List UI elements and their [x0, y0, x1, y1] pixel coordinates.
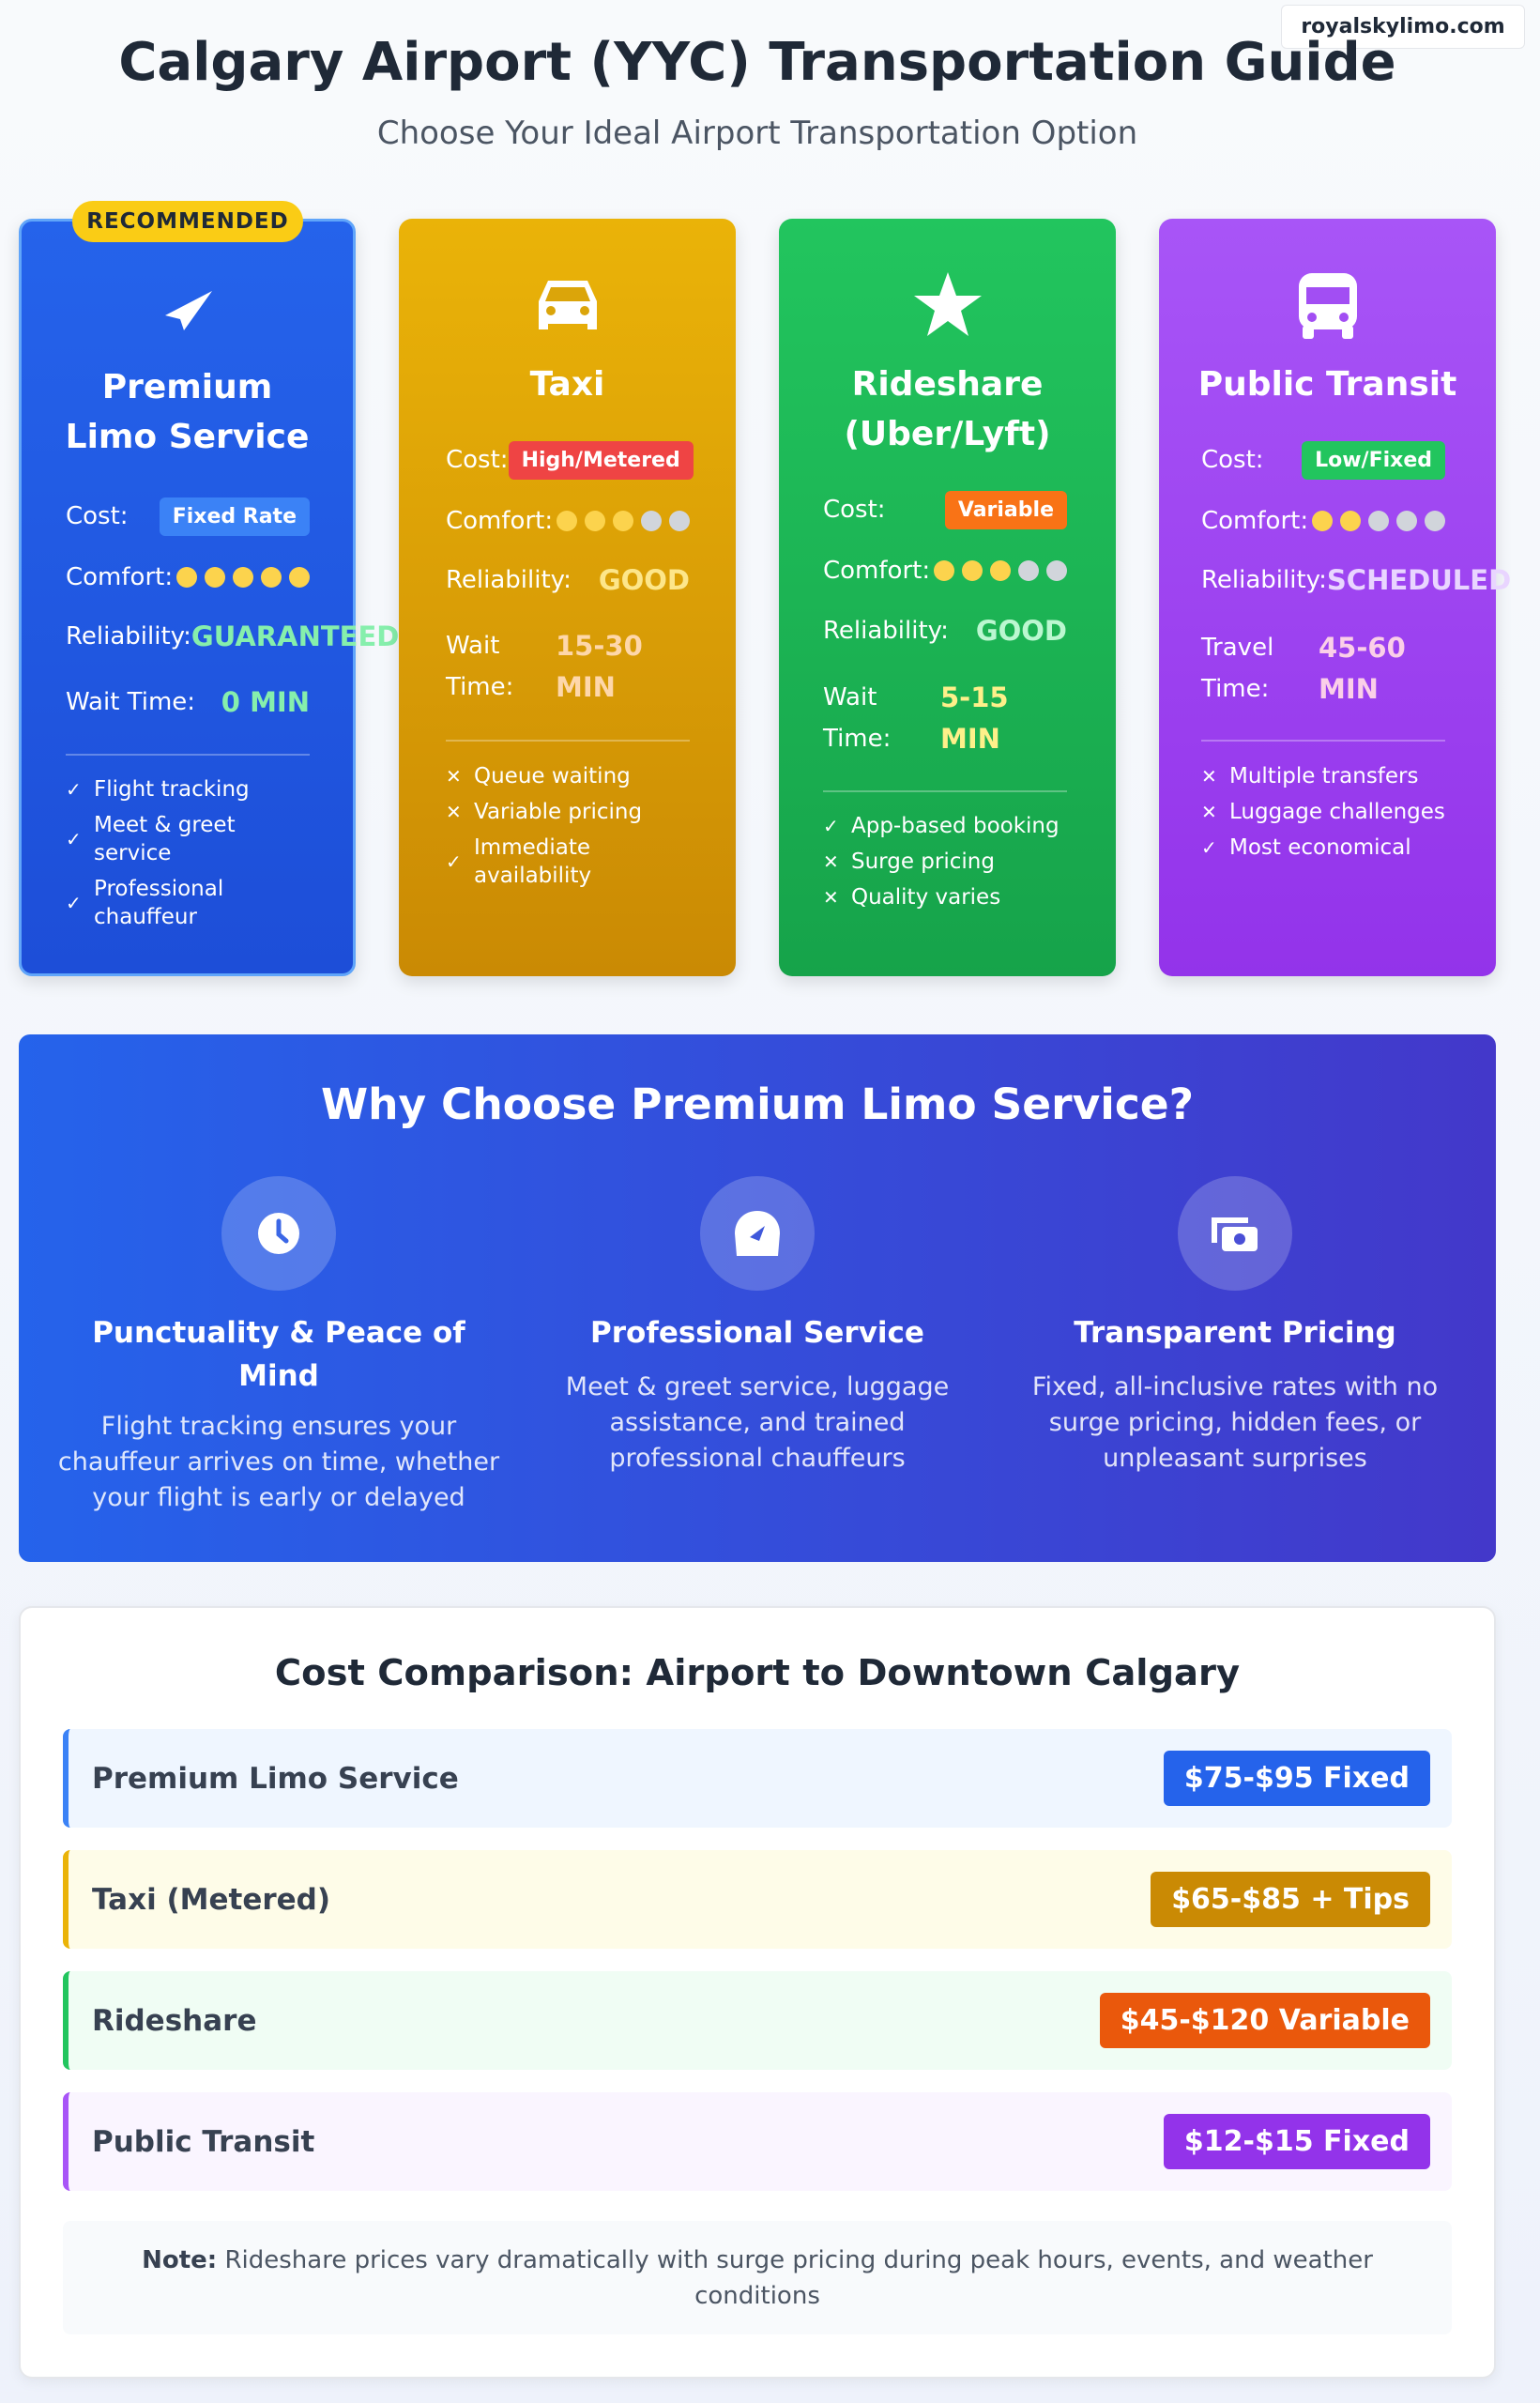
- reliability row: [823, 615, 1067, 647]
- cost comparison heading: Cost Comparison: Airport to Downtown Calgary: [275, 1652, 1240, 1694]
- features list: Quality varies: [851, 885, 1000, 910]
- features list: availability: [474, 864, 591, 888]
- wait row: 5-15: [940, 681, 1009, 713]
- reliability row: GOOD: [976, 615, 1067, 647]
- wait row: 0 MIN: [221, 686, 310, 718]
- features list: service: [94, 841, 171, 865]
- travel row: 45-60: [1319, 632, 1406, 664]
- comfort row: [446, 507, 690, 535]
- reliability row: Reliability:: [446, 566, 572, 594]
- icon: plane: [165, 291, 212, 330]
- features list: Immediate: [474, 835, 590, 860]
- subtitle: Choose Your Ideal Airport Transportation Option: [377, 115, 1137, 152]
- wait row: [445, 630, 643, 703]
- wait row: [66, 686, 310, 718]
- feature: punctuality: chauffeur arrives on time, whether: [58, 1447, 499, 1477]
- icon: star: [914, 272, 982, 336]
- features list: Flight tracking: [94, 777, 250, 802]
- feature: punctuality: Flight tracking ensures your: [101, 1412, 456, 1441]
- watermark: [1281, 5, 1525, 49]
- feature: pricing: [1032, 1176, 1438, 1473]
- features list: Multiple transfers: [1229, 764, 1419, 788]
- comfort row: Comfort:: [823, 557, 930, 585]
- features list: [1201, 764, 1445, 860]
- features list: ✕: [446, 765, 462, 788]
- reliability row: Reliability:: [66, 622, 191, 650]
- feature: pricing: Fixed, all-inclusive rates with no: [1032, 1372, 1438, 1401]
- wait row: MIN: [940, 723, 1000, 755]
- card title: Premium: [102, 368, 272, 406]
- wait row: Wait Time:: [66, 688, 195, 716]
- feature: professional: Professional Service: [590, 1316, 924, 1350]
- features list: ✓: [823, 815, 839, 837]
- features list: ✕: [823, 886, 839, 909]
- cost row: Cost:: [66, 502, 129, 530]
- card: rideshare: [779, 219, 1116, 976]
- features list: [823, 814, 1060, 910]
- comfort row: [66, 563, 310, 591]
- card title: Public Transit: [1198, 365, 1456, 404]
- wait row: [822, 681, 1009, 755]
- icon: car: [539, 281, 597, 329]
- features list: [66, 777, 250, 929]
- row: taxi price: [63, 1850, 1452, 1949]
- icon: money: [1178, 1176, 1292, 1291]
- feature: pricing: surge pricing, hidden fees, or: [1049, 1408, 1421, 1437]
- features list: ✕: [1201, 801, 1217, 823]
- features list: Most economical: [1229, 835, 1411, 860]
- features list: Luggage challenges: [1229, 800, 1445, 824]
- watermark: royalskylimo.com: [1301, 15, 1505, 38]
- row: rideshare price: [63, 1971, 1452, 2070]
- recommended badge: RECOMMENDED: [86, 209, 289, 234]
- card: public transit: [1159, 219, 1496, 976]
- travel row: MIN: [1319, 673, 1379, 705]
- features list: App-based booking: [851, 814, 1060, 838]
- reliability row: Reliability:: [1201, 566, 1327, 594]
- row: premium limo price: $75-$95 Fixed: [1184, 1762, 1410, 1795]
- card title: (Uber/Lyft): [844, 415, 1051, 453]
- row: premium limo price: [63, 1729, 1452, 1828]
- features list: Surge pricing: [851, 849, 995, 874]
- row: transit price: [63, 2092, 1452, 2191]
- comfort row: Comfort:: [66, 563, 173, 591]
- cost row: [823, 491, 1067, 529]
- row: premium limo price: Premium Limo Service: [92, 1761, 459, 1795]
- cost row: Cost:: [1201, 446, 1264, 474]
- cost row: Variable: [958, 497, 1054, 522]
- feature: punctuality: [58, 1176, 499, 1512]
- features list: ✓: [1201, 836, 1217, 859]
- features list: ✕: [1201, 765, 1217, 788]
- comfort row: Comfort:: [1201, 507, 1308, 535]
- card title: Taxi: [530, 365, 604, 404]
- reliability row: GOOD: [599, 564, 690, 596]
- features list: ✕: [446, 801, 462, 823]
- feature: professional: [566, 1176, 949, 1473]
- icon: bus: [1299, 273, 1357, 339]
- icon: badge: [700, 1176, 815, 1291]
- cost row: [66, 497, 310, 536]
- features list: ✓: [66, 778, 82, 801]
- title: Calgary Airport (YYC) Transportation Guide: [118, 32, 1396, 93]
- note: Note: Rideshare prices vary dramatically with surge pricing during peak hours, events, and weather conditions: [142, 2245, 1373, 2309]
- travel row: Time:: [1201, 675, 1269, 703]
- icon: clock: [221, 1176, 336, 1291]
- card title: Rideshare: [852, 365, 1043, 404]
- wait row: Time:: [823, 725, 891, 753]
- features list: Queue waiting: [474, 764, 631, 788]
- comfort row: Comfort:: [446, 507, 553, 535]
- recommended badge: [72, 201, 303, 242]
- feature: pricing: Transparent Pricing: [1074, 1316, 1396, 1350]
- features list: Professional: [94, 877, 223, 901]
- feature: professional: Meet & greet service, luggage: [566, 1372, 949, 1401]
- features list: ✕: [823, 850, 839, 873]
- cost row: Cost:: [446, 446, 509, 474]
- features list: ✓: [66, 892, 82, 914]
- features list: [446, 764, 642, 888]
- row: rideshare price: $45-$120 Variable: [1121, 2004, 1410, 2037]
- comfort row: [823, 557, 1067, 585]
- card title: [66, 368, 309, 456]
- row: rideshare price: Rideshare: [92, 2003, 256, 2037]
- heading: Why Choose Premium Limo Service?: [321, 1079, 1194, 1129]
- cost row: Fixed Rate: [173, 505, 297, 528]
- cost row: Cost:: [823, 496, 886, 524]
- wait row: 15-30: [556, 630, 643, 662]
- travel row: Travel: [1201, 634, 1273, 662]
- row: taxi price: Taxi (Metered): [92, 1883, 330, 1917]
- cost row: High/Metered: [522, 449, 680, 471]
- feature: punctuality: Mind: [238, 1359, 319, 1393]
- reliability row: [66, 620, 399, 652]
- wait row: Wait: [823, 683, 877, 712]
- features list: Variable pricing: [474, 800, 642, 824]
- features list: Meet & greet: [94, 813, 236, 837]
- reliability row: [1201, 564, 1511, 596]
- feature: professional: professional chauffeurs: [609, 1444, 906, 1473]
- feature: professional: assistance, and trained: [609, 1408, 906, 1437]
- reliability row: [446, 564, 690, 596]
- reliability row: GUARANTEED: [191, 620, 399, 652]
- features list: ✓: [446, 850, 462, 873]
- wait row: Time:: [446, 673, 513, 701]
- card: premium limo: [19, 219, 356, 976]
- comfort row: [1201, 507, 1445, 535]
- features list: chauffeur: [94, 905, 197, 929]
- card: taxi: [399, 219, 736, 976]
- note: [63, 2221, 1452, 2334]
- card title: [844, 365, 1051, 453]
- wait row: MIN: [556, 671, 616, 703]
- cost row: [446, 441, 694, 480]
- panel: cost comparison: [19, 1606, 1496, 2379]
- reliability row: Reliability:: [823, 617, 949, 645]
- row: transit price: Public Transit: [92, 2125, 314, 2159]
- row: taxi price: $65-$85 + Tips: [1171, 1883, 1410, 1916]
- features list: ✓: [66, 828, 82, 850]
- feature: punctuality: your flight is early or delayed: [92, 1483, 465, 1512]
- cost row: Low/Fixed: [1315, 449, 1432, 471]
- cost row: [1201, 441, 1445, 480]
- reliability row: SCHEDULED: [1327, 564, 1511, 596]
- wait row: Wait: [446, 632, 499, 660]
- panel: why choose premium limo: [19, 1034, 1496, 1562]
- row: transit price: $12-$15 Fixed: [1184, 2125, 1410, 2158]
- travel row: [1201, 632, 1406, 705]
- card title: Limo Service: [66, 418, 309, 456]
- feature: pricing: unpleasant surprises: [1103, 1444, 1367, 1473]
- feature: punctuality: Punctuality & Peace of: [92, 1316, 465, 1350]
